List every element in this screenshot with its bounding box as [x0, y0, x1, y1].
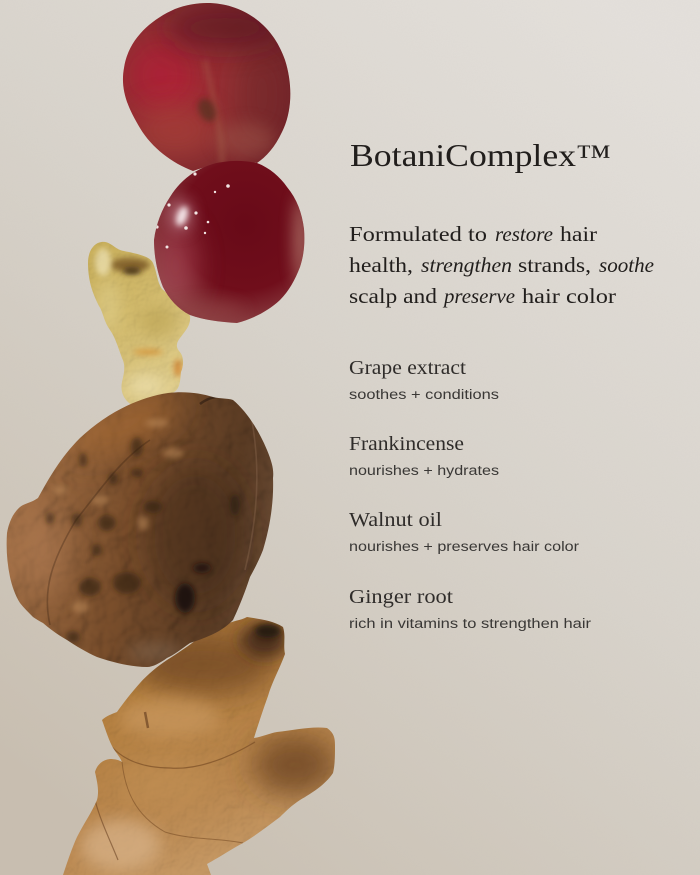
ingredient: walnut oil: Walnut oil	[349, 510, 443, 531]
intro paragraph: hair color	[522, 284, 616, 308]
halved grape slice	[122, 3, 290, 171]
intro paragraph: restore	[495, 222, 553, 246]
intro paragraph: hair	[560, 222, 597, 246]
shell highlights	[53, 419, 183, 613]
ingredient: walnut oil	[349, 510, 580, 554]
intro paragraph: strengthen	[421, 253, 512, 277]
intro paragraph: Formulated to	[349, 222, 487, 246]
ingredient: frankincense: Frankincense	[349, 434, 464, 455]
whole grape	[150, 158, 310, 326]
intro paragraph: preserve	[442, 284, 515, 308]
ingredient: grape extract: Grape extract	[349, 358, 467, 379]
shell dimples	[46, 437, 162, 643]
ingredient: walnut oil: nourishes + preserves hair color	[349, 539, 580, 554]
intro paragraph: scalp and	[349, 284, 437, 308]
intro paragraph: health,	[349, 253, 413, 277]
frankincense	[88, 242, 190, 404]
ingredient: grape extract: soothes + conditions	[349, 387, 499, 402]
ingredient: ginger root: Ginger root	[349, 587, 454, 608]
walnut	[6, 392, 274, 667]
title: BotaniComplex™	[350, 138, 611, 173]
image: ingredient stack	[0, 0, 345, 875]
ginger root	[55, 610, 345, 875]
ingredient: frankincense: nourishes + hydrates	[349, 463, 499, 478]
ingredient: ginger root	[349, 587, 592, 631]
intro paragraph	[349, 222, 654, 308]
ingredient: grape extract	[349, 358, 499, 402]
water droplets	[155, 172, 230, 248]
ingredient: frankincense	[349, 434, 499, 478]
intro paragraph: strands,	[518, 253, 591, 277]
intro paragraph: soothe	[599, 253, 654, 277]
ingredient: ginger root: rich in vitamins to strengthen hair	[349, 616, 592, 631]
